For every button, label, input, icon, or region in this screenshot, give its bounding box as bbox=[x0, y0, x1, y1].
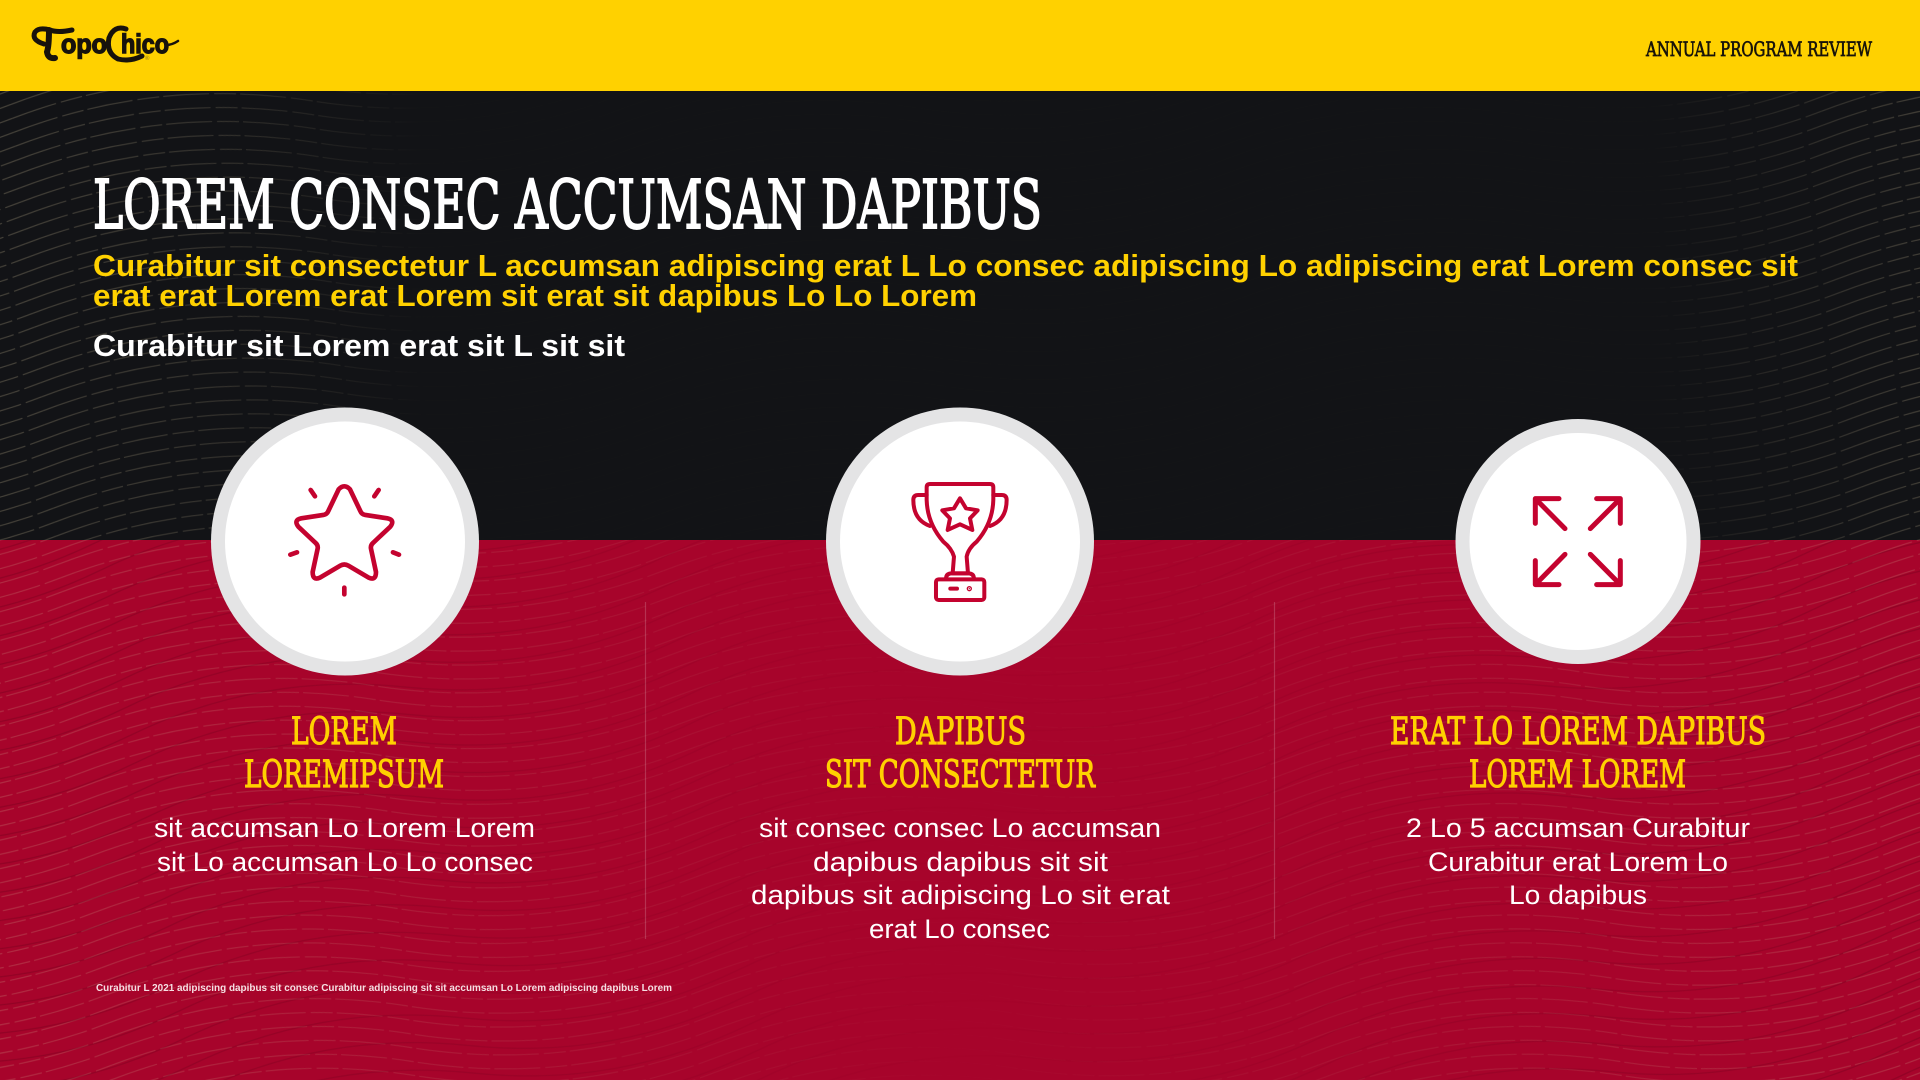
body text: column 2: dapibus dapibus sit sit bbox=[813, 847, 1109, 877]
subtitle: Curabitur sit consectetur L accumsan adipiscing erat L Lo consec adipiscing Lo adipiscing erat Lorem consec sit bbox=[93, 248, 1798, 283]
panel: column 3 bbox=[1390, 419, 1766, 910]
body text: column 2 bbox=[751, 813, 1171, 944]
panel: column 1 bbox=[154, 408, 535, 877]
panel: dark upper band bbox=[0, 91, 1920, 540]
logo: Topo Chico: ® bbox=[145, 55, 150, 62]
panel: red lower band bbox=[0, 540, 1920, 1080]
logo: Topo Chico: hico bbox=[121, 29, 169, 59]
body text: column 2: erat Lo consec bbox=[869, 914, 1050, 944]
title: LOREM CONSEC ACCUMSAN DAPIBUS bbox=[93, 166, 1042, 244]
body text: column 3 bbox=[1406, 813, 1750, 910]
logo: Topo Chico: opo bbox=[61, 29, 107, 59]
icon: star in circle bbox=[211, 408, 479, 676]
heading: column 3 bbox=[1390, 710, 1766, 796]
intro line: Curabitur sit Lorem erat sit L sit sit bbox=[93, 328, 625, 363]
body text: column 3: Lo dapibus bbox=[1509, 880, 1647, 910]
column dividers bbox=[646, 602, 1274, 939]
heading: column 3: LOREM LOREM bbox=[1469, 753, 1686, 796]
body text: column 3: Curabitur erat Lorem Lo bbox=[1428, 847, 1728, 877]
panel: yellow header bar bbox=[0, 0, 1920, 91]
subtitle bbox=[93, 248, 1798, 313]
heading: column 1 bbox=[244, 710, 444, 796]
heading: column 2 bbox=[825, 710, 1096, 796]
body text: column 1 bbox=[154, 813, 535, 877]
body text: column 2: dapibus sit adipiscing Lo sit erat bbox=[751, 880, 1171, 910]
body text: column 2: sit consec consec Lo accumsan bbox=[759, 813, 1161, 843]
heading: column 2: SIT CONSECTETUR bbox=[825, 753, 1096, 796]
icon: trophy in circle bbox=[826, 408, 1094, 676]
body text: column 3: 2 Lo 5 accumsan Curabitur bbox=[1406, 813, 1750, 843]
body text: column 1: sit Lo accumsan Lo Lo consec bbox=[157, 847, 533, 877]
footnote: Curabitur L 2021 adipiscing dapibus sit consec Curabitur adipiscing sit sit accumsan Lo Lorem adipiscing dapibus Lorem bbox=[96, 982, 672, 994]
panel: column 2 bbox=[751, 408, 1171, 944]
heading: column 3: ERAT LO LOREM DAPIBUS bbox=[1390, 710, 1766, 753]
body text: column 1: sit accumsan Lo Lorem Lorem bbox=[154, 813, 535, 843]
heading: column 1: LOREM bbox=[291, 710, 397, 753]
heading: column 1: LOREMIPSUM bbox=[244, 753, 444, 796]
icon: expand arrows in circle bbox=[1456, 419, 1700, 664]
logo: Topo Chico bbox=[34, 28, 178, 62]
subtitle: erat erat Lorem erat Lorem sit erat sit dapibus Lo Lo Lorem bbox=[93, 278, 977, 313]
heading: column 2: DAPIBUS bbox=[895, 710, 1026, 753]
